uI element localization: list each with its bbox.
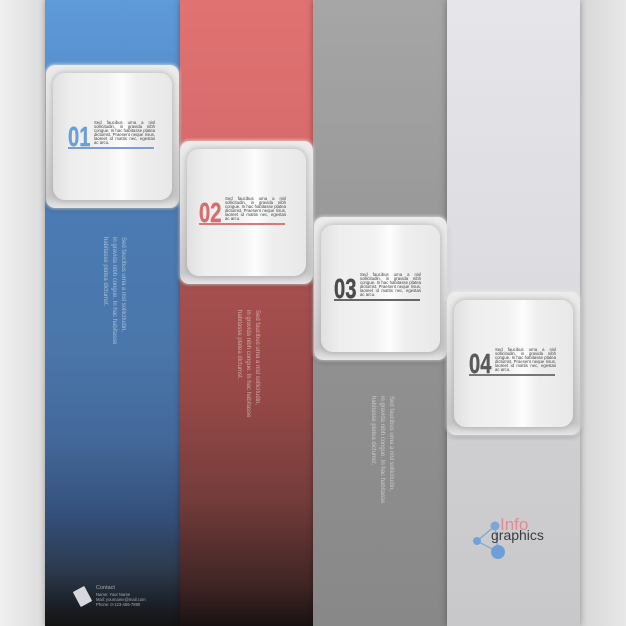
logo: infographics: graphics [491,527,544,543]
strip: blue [45,0,180,626]
card 03 text: Sed faucibus urna a nisl sollicitudin, in gravida nibh congue. In hac habitasse platea dictumst. Praesent neque risus, laoreet id mattis nec, egestas ac arcu. [360,272,421,297]
number 03: 03 [334,273,356,304]
vertical text: red strip: in gravida nibh congue. In hac habitasse [245,310,251,417]
vertical text: blue strip: in gravida nibh congue. In hac habitasse [111,237,117,344]
vertical text: red strip [236,310,260,418]
vertical text: red strip: habitasse platea dictumst. [236,310,242,379]
logo: infographics [473,515,544,559]
vertical text: blue strip: habitasse platea dictumst. [102,237,108,306]
card 01 text: Sed faucibus urna a nisl sollicitudin, in gravida nibh congue. In hac habitasse platea dictumst. Praesent neque risus, laoreet id mattis nec, egestas ac arcu. [94,120,155,145]
vertical text: blue strip: Sed faucibus urna a nisl sollicitudin, [120,237,126,332]
contact text: Phone: 0-123-456-7890 [96,602,140,607]
contact text: Name: Your Name [96,592,130,597]
logo: infographics: Info [500,515,528,534]
number 02: 02 [199,197,221,228]
vertical text: gray strip [370,396,394,504]
number 04: 04 [469,348,491,379]
card 04 [447,292,580,435]
card 03 [314,217,447,360]
icon: contact card [73,586,92,607]
vertical text: red strip: Sed faucibus urna a nisl sollicitudin, [254,310,260,405]
contact text: Mail: yourname@mail.com [96,597,146,602]
card 04 text: Sed faucibus urna a nisl sollicitudin, in gravida nibh congue. In hac habitasse platea dictumst. Praesent neque risus, laoreet id mattis nec, egestas ac arcu. [495,347,556,372]
strip: light [447,0,580,626]
card 02 [180,141,313,284]
contact text [96,585,146,607]
card 01 [46,65,179,208]
strip: red [180,0,313,626]
card 02 text: Sed faucibus urna a nisl sollicitudin, in gravida nibh congue. In hac habitasse platea dictumst. Praesent neque risus, laoreet id mattis nec, egestas ac arcu. [225,196,286,221]
vertical text: gray strip: Sed faucibus urna a nisl sollicitudin, [388,396,394,491]
contact text: Contact [96,585,115,591]
vertical text: gray strip: in gravida nibh congue. In hac habitasse [379,396,385,503]
vertical text: blue strip [102,237,126,344]
vertical text: gray strip: habitasse platea dictumst. [370,396,376,465]
number 01: 01 [68,121,90,152]
strip: gray [313,0,447,626]
